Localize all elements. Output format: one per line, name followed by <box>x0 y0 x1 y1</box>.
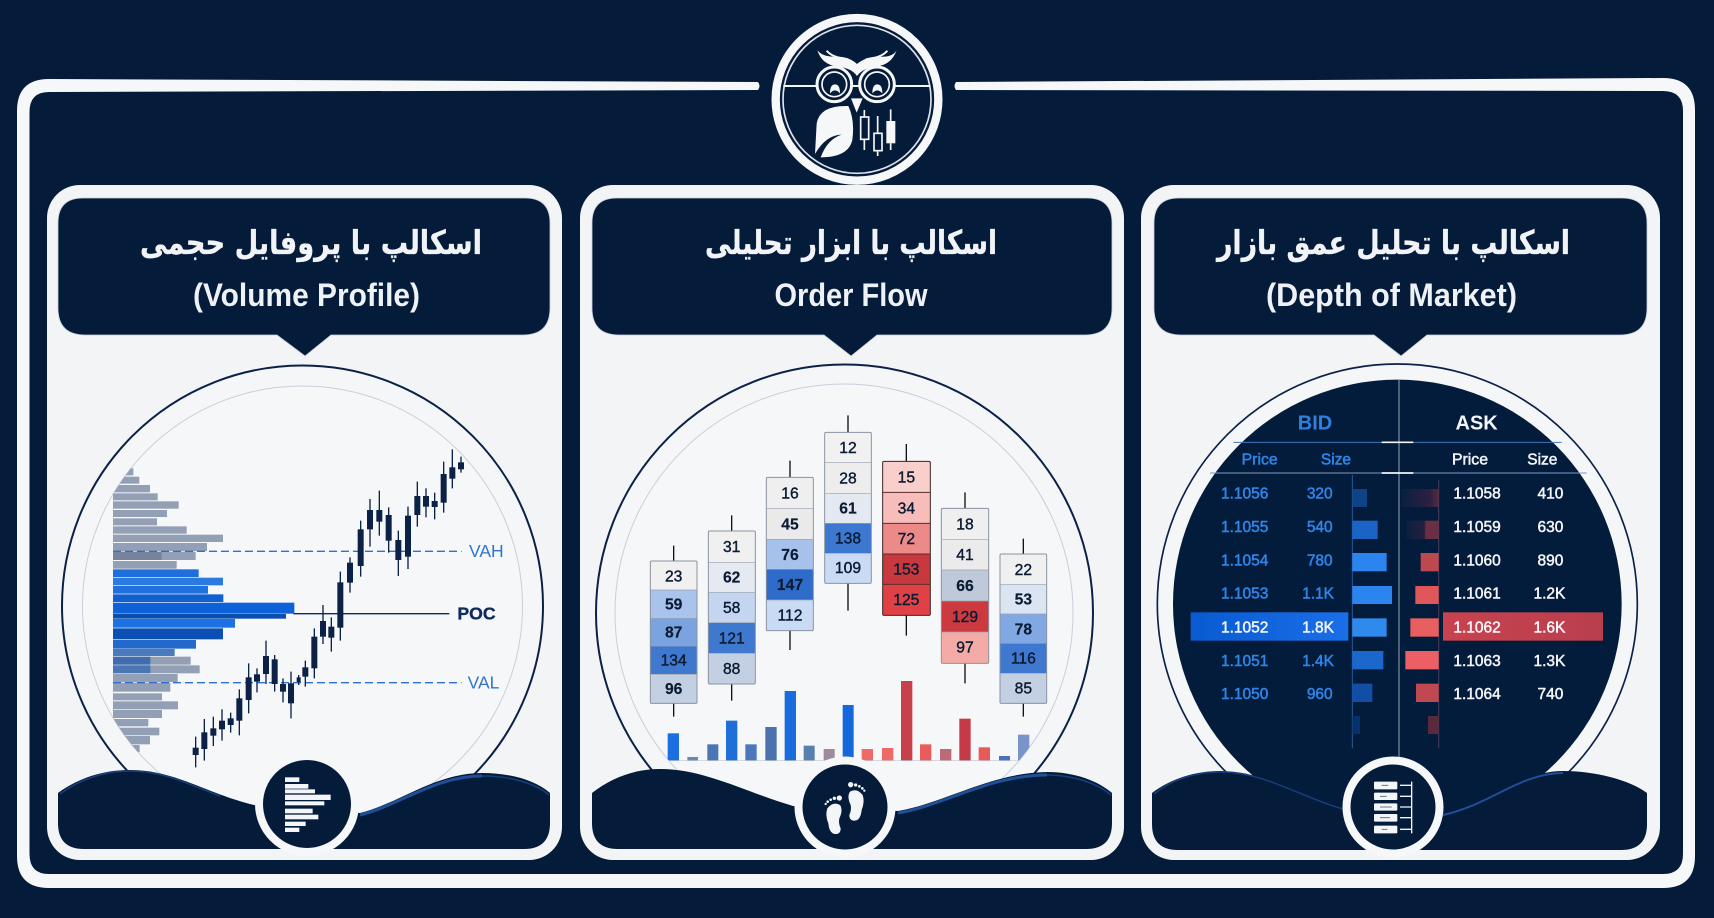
label VAH: VAH <box>469 541 504 561</box>
icon: volume bars <box>259 756 355 852</box>
chart circle <box>61 364 544 784</box>
footprint candle 4: 28 <box>839 470 857 487</box>
ask rows: 1.1058 <box>1453 486 1501 503</box>
ask rows: 890 <box>1537 552 1563 569</box>
footprint candle 4: 109 <box>835 560 861 577</box>
chart circle <box>595 364 1094 779</box>
footprint candle 6: 129 <box>952 609 978 626</box>
header banner: اسکالپ با تحلیل عمق بازار <box>1215 223 1570 263</box>
ask rows: 1.1059 <box>1453 519 1501 536</box>
footprint candle 5 <box>883 444 930 636</box>
ask rows: 630 <box>1537 519 1563 536</box>
footprint candle 2: 58 <box>723 600 741 617</box>
column headers: Price <box>1452 451 1488 468</box>
ask rows: 1.2K <box>1533 586 1566 603</box>
bid rows: 1.1050 <box>1221 686 1268 703</box>
footprint candle 5: 153 <box>893 561 920 578</box>
label POC: POC <box>457 604 496 624</box>
bid rows <box>1221 486 1335 703</box>
footprint candle 2: 121 <box>719 631 745 648</box>
footprint candle 6: 97 <box>956 640 974 657</box>
card <box>47 185 562 860</box>
footprint candle 6: 18 <box>956 517 974 534</box>
footprint candle 7: 53 <box>1015 592 1032 609</box>
footprint candle 6: 66 <box>956 578 974 595</box>
bid rows: 960 <box>1307 686 1333 703</box>
bottom wave <box>592 769 1112 849</box>
column headers: Price <box>1242 451 1278 468</box>
footprint candle 7: 22 <box>1015 562 1032 579</box>
footprint candle 7: 85 <box>1015 680 1032 697</box>
ask rows: 410 <box>1537 486 1563 503</box>
bottom wave <box>1152 771 1647 850</box>
panel: depth of market <box>1141 185 1660 860</box>
footprint candle 6: 41 <box>956 547 974 564</box>
header banner <box>58 198 550 356</box>
bid rows: 1.1054 <box>1221 552 1269 569</box>
header banner: Order Flow <box>774 277 928 313</box>
ask rows: 740 <box>1537 686 1563 703</box>
bid rows: 1.1056 <box>1221 486 1268 503</box>
bid rows: 320 <box>1307 486 1333 503</box>
DOM table circle <box>1157 364 1637 844</box>
label VAL: VAL <box>468 673 500 693</box>
bid rows: 1.1051 <box>1221 653 1268 670</box>
footprint candle 3 <box>766 461 813 650</box>
footprint candle 7: 78 <box>1015 621 1032 638</box>
footprint candle 2: 62 <box>723 570 741 587</box>
column headers <box>1242 412 1557 468</box>
footprint candle 7 <box>1000 539 1047 717</box>
footprint candle 1: 23 <box>665 568 683 585</box>
header banner: (Depth of Market) <box>1266 277 1517 313</box>
bid rows: 1.1K <box>1302 586 1335 603</box>
bid rows: 1.4K <box>1302 653 1335 670</box>
bid rows: 1.1055 <box>1221 519 1268 536</box>
footprint candle 4: 61 <box>839 501 857 518</box>
bid rows: 540 <box>1307 519 1333 536</box>
footprint candle 5: 15 <box>898 470 915 487</box>
footprint candle 4: 138 <box>835 530 861 547</box>
footprint candle 3: 45 <box>781 516 799 533</box>
card <box>1141 185 1660 860</box>
footprint candle 1: 59 <box>665 597 683 614</box>
icon: footprints <box>798 760 892 854</box>
footprint candle 1: 134 <box>661 653 687 670</box>
column headers: Size <box>1321 451 1351 468</box>
ask rows: 1.1061 <box>1453 586 1501 603</box>
VAL line <box>113 681 462 685</box>
column headers: ASK <box>1456 412 1498 434</box>
header banner: اسکالپ با پروفایل حجمی <box>140 223 482 263</box>
footprint candle 4 <box>825 415 871 611</box>
column headers: BID <box>1298 412 1332 434</box>
ask rows: 1.3K <box>1533 653 1566 670</box>
best ask highlight <box>1443 612 1603 641</box>
footprint candle 6 <box>941 492 989 683</box>
ask rows: 1.1064 <box>1453 686 1501 703</box>
footprint candle 5: 125 <box>893 592 920 609</box>
POC line <box>293 612 449 616</box>
bid rows: 780 <box>1307 552 1333 569</box>
footprint candle 1 <box>650 546 697 717</box>
bid rows: 1.1053 <box>1221 586 1268 603</box>
ask rows: 1.1062 <box>1453 620 1501 637</box>
volume histogram <box>668 681 1031 761</box>
panel: volume profile <box>47 185 562 860</box>
footprint candle 2 <box>708 515 755 701</box>
header banner: اسکالپ با ابزار تحلیلی <box>705 223 997 263</box>
ask rows: 1.6K <box>1533 620 1566 637</box>
bid depth bars <box>1352 489 1392 734</box>
ask depth bars <box>1402 489 1439 734</box>
footprint candle 2: 88 <box>723 661 741 678</box>
horizontal volume bars <box>113 468 294 752</box>
column headers: Size <box>1527 451 1557 468</box>
bottom wave <box>58 770 550 849</box>
panel: order flow <box>580 185 1124 862</box>
logo: owl emblem <box>776 18 938 181</box>
footprint candle 1: 96 <box>665 681 683 698</box>
header banner: (Volume Profile) <box>193 277 420 313</box>
footprint candle 4: 12 <box>839 440 857 457</box>
bid rows: 1.1052 <box>1221 620 1268 637</box>
icon: order book <box>1346 760 1440 854</box>
footprint chart <box>650 415 1047 761</box>
footprint candle 3: 112 <box>778 608 802 625</box>
footprint candle 3: 147 <box>777 577 803 594</box>
best bid highlight <box>1191 612 1348 641</box>
table grid lines <box>1210 380 1587 757</box>
ask rows: 1.1060 <box>1453 552 1501 569</box>
ask rows <box>1453 486 1566 703</box>
footprint candle 3: 76 <box>781 547 799 564</box>
header banner <box>1154 198 1647 356</box>
footprint candle 3: 16 <box>781 485 799 502</box>
footprint candle 5: 34 <box>898 500 915 517</box>
bid rows: 1.8K <box>1302 620 1335 637</box>
candlesticks <box>193 449 464 767</box>
header banner <box>592 198 1112 356</box>
card <box>580 185 1124 860</box>
volume profile chart with candles <box>113 449 504 767</box>
footprint candle 5: 72 <box>898 531 915 548</box>
VAH line <box>113 549 462 553</box>
footprint candle 1: 87 <box>665 625 683 642</box>
footprint candle 2: 31 <box>723 539 740 556</box>
footprint candle 7: 116 <box>1011 651 1036 668</box>
ask rows: 1.1063 <box>1453 653 1501 670</box>
